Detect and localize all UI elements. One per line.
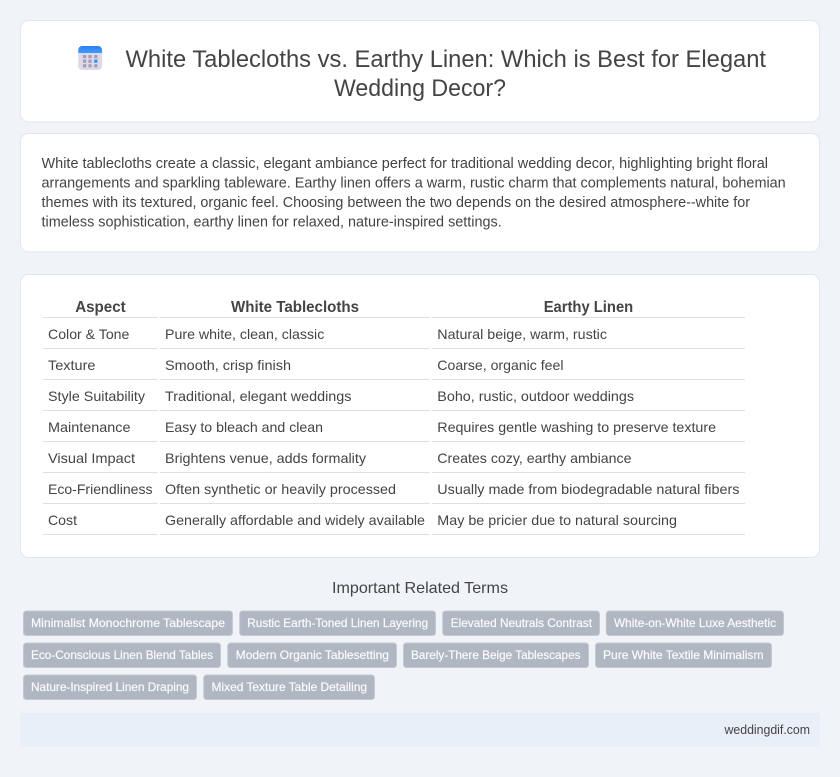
- row: maintenance: Requires gentle washing to preserve texture: [437, 419, 716, 435]
- row: color and tone: Pure white, clean, classic: [165, 326, 324, 342]
- panel: description: [20, 134, 820, 252]
- tag: modern organic: [228, 643, 396, 668]
- row: cost: May be pricier due to natural sourcing: [437, 512, 677, 528]
- row: eco-friendliness: [43, 481, 745, 504]
- tag: pure white textile: Pure White Textile Minimalism: [603, 648, 764, 662]
- related terms heading: Important Related Terms: [332, 580, 508, 597]
- footer: weddingdif.com: [724, 723, 810, 737]
- row: maintenance: Easy to bleach and clean: [165, 419, 323, 435]
- row: maintenance: [43, 419, 745, 442]
- tag: elevated neutrals: [443, 611, 600, 636]
- table header: White Tablecloths: [231, 299, 359, 316]
- related terms tags: [24, 611, 784, 700]
- table header: Aspect: [75, 299, 126, 316]
- row: cost: Generally affordable and widely available: [165, 512, 425, 528]
- tag: modern organic: Modern Organic Tablesetting: [236, 648, 389, 662]
- row: texture: [43, 357, 745, 380]
- row: style suitability: Style Suitability: [48, 388, 145, 404]
- tag: rustic earth-toned: Rustic Earth-Toned Linen Layering: [247, 616, 428, 630]
- panel: comparison table: [20, 274, 820, 558]
- icon: calendar: [78, 46, 102, 70]
- tag: pure white textile: [596, 643, 772, 668]
- tag: white-on-white: [606, 611, 784, 636]
- row: texture: Texture: [48, 357, 96, 373]
- table header: Earthy Linen: [544, 299, 633, 316]
- tag: nature-inspired: [24, 675, 196, 700]
- tag: barely-there beige: Barely-There Beige Tablescapes: [411, 648, 580, 662]
- row: texture: Coarse, organic feel: [437, 357, 564, 373]
- title: [126, 46, 766, 102]
- tag: elevated neutrals: Elevated Neutrals Contrast: [451, 616, 593, 630]
- tag: white-on-white: White-on-White Luxe Aesthetic: [614, 616, 776, 630]
- description text: [42, 156, 786, 230]
- row: maintenance: Maintenance: [48, 419, 131, 435]
- row: visual impact: Creates cozy, earthy ambiance: [437, 450, 632, 466]
- description text: arrangements and sparkling tableware. Earthy linen offers a warm, rustic charm that complements natural, bohemian: [42, 175, 786, 191]
- title: Wedding Decor?: [334, 75, 506, 102]
- row: cost: Cost: [48, 512, 77, 528]
- row: visual impact: Visual Impact: [48, 450, 135, 466]
- tag: rustic earth-toned: [240, 611, 436, 636]
- row: visual impact: [43, 450, 745, 473]
- row: style suitability: [43, 388, 745, 411]
- tag: minimalist monochrome: Minimalist Monochrome Tablescape: [31, 616, 225, 630]
- row: visual impact: Brightens venue, adds formality: [165, 450, 366, 466]
- row: color and tone: Color & Tone: [48, 326, 130, 342]
- row: texture: Smooth, crisp finish: [165, 357, 291, 373]
- tag: barely-there beige: [404, 643, 588, 668]
- row: color and tone: Natural beige, warm, rustic: [437, 326, 607, 342]
- tag: mixed texture: Mixed Texture Table Detailing: [212, 680, 367, 694]
- tag: nature-inspired: Nature-Inspired Linen Draping: [31, 680, 189, 694]
- row: style suitability: Traditional, elegant weddings: [165, 388, 352, 404]
- row: eco-friendliness: Eco-Friendliness: [48, 481, 152, 497]
- tag: eco-conscious: Eco-Conscious Linen Blend Tables: [31, 648, 213, 662]
- description text: White tablecloths create a classic, elegant ambiance perfect for traditional wedding decor, highlighting bright floral: [42, 156, 768, 172]
- tag: minimalist monochrome: [24, 611, 232, 636]
- description text: themes with its textured, organic feel. Choosing between the two depends on the desired atmosphere--white for: [42, 195, 750, 211]
- tag: mixed texture: [204, 675, 374, 700]
- row: cost: [43, 512, 745, 535]
- row: style suitability: Boho, rustic, outdoor weddings: [437, 388, 634, 404]
- footer: [20, 713, 820, 747]
- row: eco-friendliness: Often synthetic or heavily processed: [165, 481, 396, 497]
- table header: [43, 299, 745, 318]
- title: White Tablecloths vs. Earthy Linen: Which is Best for Elegant: [126, 46, 766, 73]
- row: color and tone: [43, 326, 745, 349]
- panel: title card: [20, 20, 820, 122]
- tag: eco-conscious: [24, 643, 220, 668]
- row: eco-friendliness: Usually made from biodegradable natural fibers: [437, 481, 740, 497]
- description text: timeless sophistication, earthy linen for relaxed, nature-inspired settings.: [42, 214, 502, 230]
